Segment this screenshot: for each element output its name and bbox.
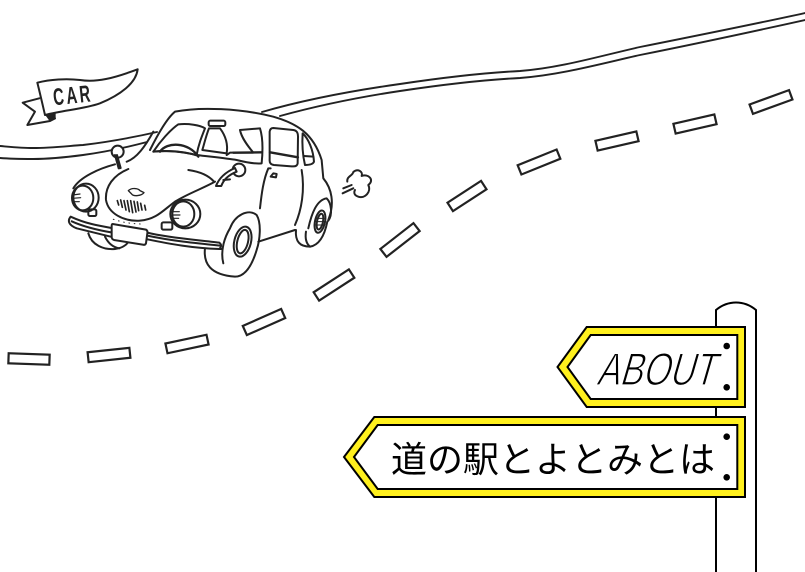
exhaust puff xyxy=(343,170,371,197)
wheels xyxy=(88,198,331,277)
road edge lines xyxy=(0,13,805,159)
mirrors xyxy=(112,146,245,186)
road centre dashes xyxy=(8,90,792,365)
grille and emblem xyxy=(113,189,146,224)
car illustration xyxy=(68,109,371,277)
signpost pole xyxy=(716,302,756,572)
body outline xyxy=(73,109,332,242)
sign: ABOUT: ABOUT xyxy=(593,344,726,395)
sign: ABOUT xyxy=(558,327,745,407)
bumper and number plate xyxy=(69,217,221,249)
windows xyxy=(153,121,314,166)
headlights xyxy=(72,184,200,230)
car flag xyxy=(23,69,138,125)
sign: michi no eki toyotomi to wa xyxy=(344,417,745,497)
sign: michi no eki toyotomi to wa: 道の駅とよとみとは xyxy=(391,439,715,480)
car flag: CAR xyxy=(52,81,94,111)
